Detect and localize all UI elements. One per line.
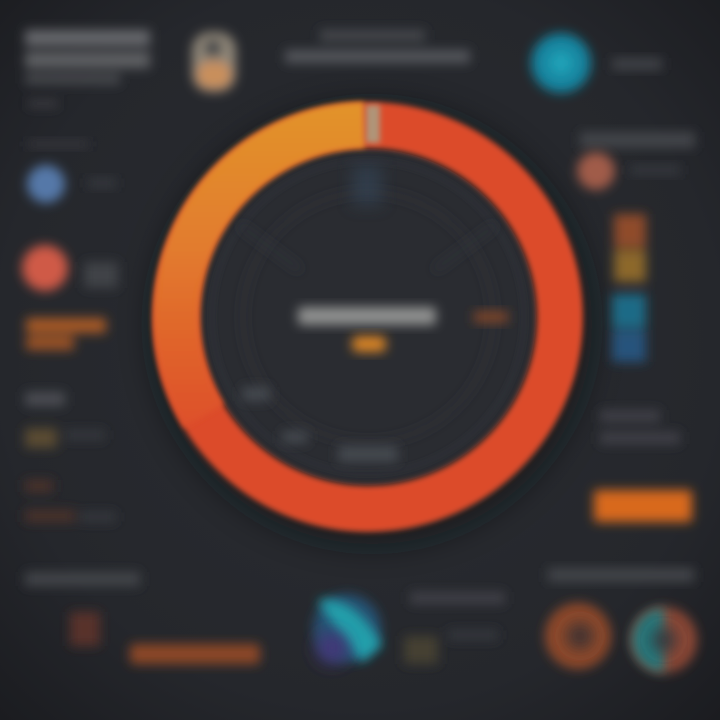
bottom-right heading [548, 568, 694, 582]
left item: orange bar [26, 318, 106, 350]
inner dial [200, 149, 536, 485]
right stacked bar [612, 214, 646, 362]
dial small labels [242, 387, 398, 462]
ring: pale gap [366, 105, 380, 143]
left legend list [25, 392, 116, 522]
icon: teal purple blob [313, 594, 382, 664]
bottom orange bar label [130, 644, 260, 664]
donut chart [176, 105, 564, 516]
ring: red segment [176, 125, 560, 509]
icon: top figure [192, 32, 236, 92]
bottom-left heading [25, 572, 140, 646]
right item: heading and icon [577, 132, 695, 190]
icon: bottom-right teal red circle [631, 607, 697, 673]
icon: teal circle [531, 33, 591, 93]
bottom centre text [404, 592, 505, 664]
icon: bottom-right orange circle [545, 603, 611, 669]
top-right text [612, 58, 662, 70]
top-left heading [25, 30, 150, 107]
top heading [285, 30, 470, 63]
right text block [600, 410, 680, 444]
ring shadow [180, 132, 564, 516]
left item: red icon [22, 245, 118, 291]
centre label [298, 307, 508, 352]
right orange bar [594, 490, 692, 522]
ring: orange segment [176, 125, 364, 416]
left item: blue icon [27, 140, 116, 203]
